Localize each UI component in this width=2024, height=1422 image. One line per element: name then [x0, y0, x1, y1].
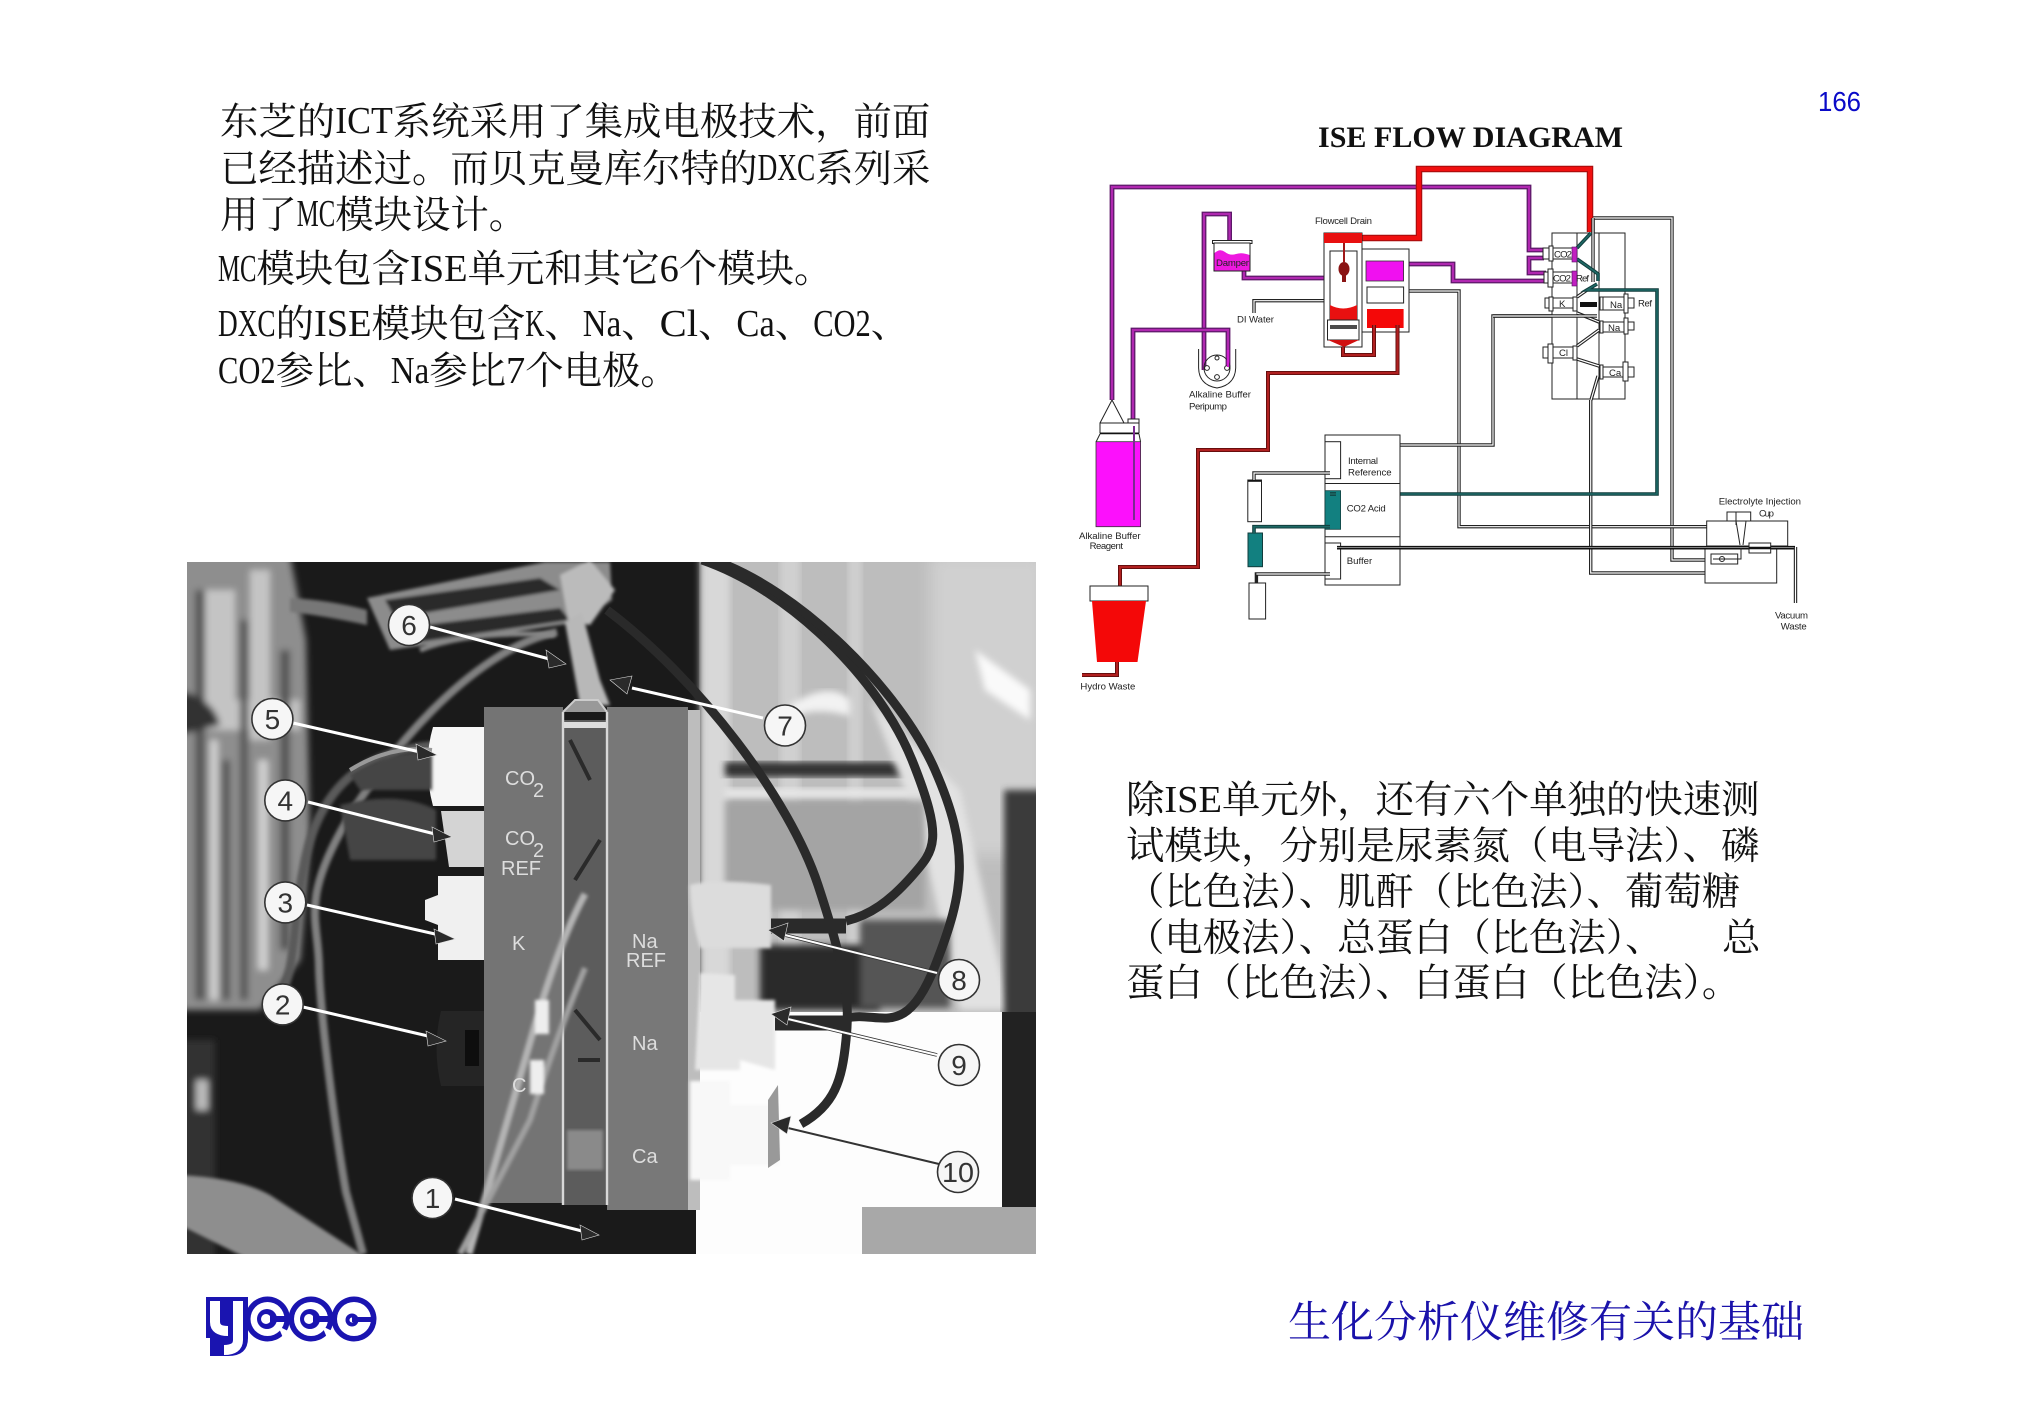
hydro waste cup [1082, 586, 1148, 675]
alkaline buffer reagent bottle [1096, 400, 1141, 527]
line 5: 、 [544, 304, 583, 346]
tubes at bottom-left [187, 1174, 364, 1254]
label: DI water: DI Water [1237, 314, 1275, 326]
bottle: CO2 acid [1248, 527, 1330, 567]
line 6: 参比、 [276, 351, 391, 393]
electrode: CO2 Ref: Ref [1576, 274, 1589, 284]
bottle: internal reference [1248, 473, 1330, 522]
line 2: DXC [758, 147, 815, 189]
label: electrolyte injection cup [1719, 496, 1801, 520]
electrode: CO2 Ref [1544, 269, 1589, 287]
tube: purple damper line [1204, 214, 1230, 370]
tube: purple supply line to electrodes [1112, 187, 1544, 400]
heading: ISE flow diagram: ISE FLOW DIAGRAM [1318, 121, 1623, 154]
label: alkaline buffer reagent: Alkaline Buffer [1079, 531, 1141, 542]
block labels: 2 [533, 840, 544, 862]
block labels: REF [626, 950, 666, 972]
footer title: 生化分析仪维修有关的基础 [1288, 1300, 1804, 1347]
block labels: Na [632, 1033, 658, 1055]
line 6: 个电极。 [525, 350, 679, 393]
damper [1212, 240, 1252, 271]
line 5: 蛋白（比色法）、白蛋白（比色法）。 [1126, 963, 1740, 1005]
line 6 [218, 350, 679, 393]
line 5: 、 [871, 304, 909, 346]
line 6: Na [391, 350, 429, 392]
central ISE block [484, 700, 700, 1210]
right plugs [690, 882, 780, 1180]
block labels: 2 [533, 780, 544, 802]
electrode: Na: Na [1608, 323, 1621, 334]
line 5: 、 [698, 304, 736, 346]
line 3 [220, 193, 527, 237]
callout badge 2: 2 [275, 990, 290, 1020]
block labels: Na [632, 931, 658, 953]
line 4 [218, 248, 832, 291]
callout badge 7 [764, 705, 806, 746]
tube: red flowcell drain [1362, 169, 1590, 238]
line 5: 、 [775, 304, 813, 346]
callout badge 1: 1 [425, 1183, 440, 1214]
line 5: Ca [736, 303, 775, 345]
line 2: 试模块，分别是尿素氮（电导法）、磷 [1126, 825, 1759, 868]
line 3: 模块设计。 [335, 195, 527, 237]
label: alkaline buffer reagent [1079, 531, 1141, 552]
line 5: 、 [621, 304, 660, 346]
tube: purple link CO2 ports [1529, 258, 1546, 273]
line 6: CO2 [218, 350, 276, 392]
line 6: 7 [506, 350, 525, 392]
line 3: MC [297, 193, 335, 235]
electrode: Cl [1543, 344, 1577, 363]
callout badge 1 [412, 1178, 453, 1218]
tube: purple damper to flowcell [1244, 271, 1324, 278]
line 2: 已经描述过。而贝克曼库尔特的 [220, 148, 757, 191]
electrode: CO2 Ref: CO2 [1553, 274, 1571, 284]
logo: yeec [206, 1296, 376, 1356]
label: CO2 acid: CO2 Acid [1347, 504, 1386, 514]
tubes on face [460, 894, 585, 1254]
block labels [501, 768, 666, 1168]
callout badge 5 [252, 698, 293, 740]
line 6: 参比 [429, 351, 506, 393]
block labels: K [512, 933, 526, 955]
line 4: ISE [410, 248, 468, 290]
line 3: 用了 [220, 195, 297, 237]
peripump [1199, 349, 1236, 388]
electrode: Ca: Ca [1609, 368, 1622, 379]
line 5: DXC [218, 303, 276, 345]
electrode: Cl: Cl [1559, 348, 1568, 359]
label: flowcell drain: Flowcell Drain [1315, 216, 1372, 227]
label: alkaline buffer peripump: Peripump [1189, 402, 1227, 412]
tube: dark red waste lines [1120, 325, 1398, 586]
line 4: 6 [660, 248, 679, 290]
callout badge 3 [265, 882, 306, 923]
electrode: Na ref: Ref [1638, 298, 1652, 310]
block labels: REF [501, 858, 541, 880]
label: vacuum waste: Vacuum [1775, 610, 1808, 622]
callout badge 10 [938, 1152, 978, 1192]
letter e [245, 1296, 290, 1342]
line 3: （比色法）、肌酐（比色法）、葡萄糖 [1126, 871, 1740, 914]
callout badge 7: 7 [777, 710, 793, 742]
flowcell side chambers [1362, 249, 1409, 332]
callout badge 10: 10 [942, 1157, 974, 1188]
letter e [288, 1296, 334, 1342]
line 2: 系列采 [815, 149, 930, 191]
photo background [187, 555, 1046, 1257]
callout arrows [293, 627, 939, 1240]
electrode: CO2 [1543, 246, 1577, 262]
line 5: CO2 [813, 303, 871, 345]
tube: purple reagent to pump [1133, 330, 1228, 432]
line 4: 总 [1722, 918, 1761, 960]
block labels: CO [505, 828, 535, 850]
tube arc behind plugs [282, 740, 430, 985]
tube: purple chamber to CO2 ref [1401, 264, 1546, 281]
reagent block [1325, 435, 1400, 585]
callout badge 9 [938, 1044, 980, 1086]
line 1: 系统采用了集成电极技术，前面 [393, 101, 930, 144]
electrode: Na [1600, 318, 1634, 334]
label: internal reference: Reference [1348, 468, 1392, 478]
block labels: Ca [632, 1146, 658, 1168]
flowcell [1324, 233, 1362, 347]
callout badge 4 [265, 780, 306, 821]
line 4: （电极法）、总蛋白（比色法）、 [1126, 917, 1663, 960]
line 1: ICT [335, 100, 393, 142]
damper: Damper [1216, 258, 1250, 269]
line 1: 单元外，还有六个单独的快速测 [1222, 779, 1759, 822]
page number: 166 [1818, 86, 1861, 117]
line 1: 除 [1126, 780, 1165, 822]
callout badge 4: 4 [278, 786, 293, 816]
label: alkaline buffer peripump: Alkaline Buffer [1189, 390, 1252, 400]
text block: other rapid test modules [1126, 779, 1761, 1005]
line 5: Na [583, 303, 621, 345]
block labels: C [512, 1075, 526, 1097]
callout badge 8: 8 [951, 965, 967, 996]
line 5: 的 [276, 304, 314, 346]
chart: ISE flow diagram [1079, 169, 1808, 692]
bottle: buffer [1249, 574, 1330, 619]
label: alkaline buffer reagent: Reagent [1090, 541, 1123, 552]
electrode: Na ref [1600, 294, 1652, 313]
label: internal reference [1348, 456, 1392, 478]
label: internal reference: Internal [1348, 456, 1378, 467]
callout badge 9: 9 [951, 1050, 967, 1081]
label: buffer: Buffer [1347, 556, 1373, 567]
electrode block [1552, 233, 1625, 399]
line 4: 单元和其它 [468, 249, 660, 291]
callout badge 5: 5 [265, 704, 280, 735]
label: electrolyte injection cup: Cup [1759, 508, 1774, 520]
line 4: 模块包含 [256, 248, 410, 291]
line 5: 模块包含 [372, 303, 525, 346]
top assembly [290, 560, 615, 705]
line 5: Cl [660, 303, 698, 345]
tube: white reference lines [1254, 218, 1736, 573]
block labels: CO [505, 768, 535, 790]
line 1: 东芝的 [220, 102, 335, 144]
electrode: Ca [1600, 362, 1634, 381]
line 4: MC [218, 248, 256, 290]
callout badge 8 [938, 960, 980, 1000]
tube: double lines over block [1493, 218, 1599, 400]
electrode: CO2: CO2 [1554, 250, 1572, 260]
black cables [607, 560, 959, 1124]
text block: top-left description [218, 100, 930, 393]
line 4: 个模块。 [679, 249, 832, 291]
electrode: K [1545, 297, 1597, 311]
electrode: K: K [1559, 299, 1566, 310]
line 5 [218, 303, 909, 346]
electrolyte injection cup [1337, 512, 1796, 603]
line 1: ISE [1164, 779, 1222, 821]
callout badge 2 [262, 984, 303, 1025]
callout badge 6: 6 [401, 610, 417, 641]
label: electrolyte injection cup: Electrolyte Injection [1719, 496, 1801, 508]
letter c [332, 1296, 376, 1342]
clear manifold at left [180, 555, 310, 1260]
line 5: K [525, 303, 545, 345]
letter y [206, 1297, 248, 1356]
line 5: ISE [314, 303, 372, 345]
left plugs [340, 727, 484, 1086]
label: alkaline buffer peripump [1189, 390, 1252, 412]
label: vacuum waste [1775, 610, 1808, 632]
electrode: Na ref: Na [1610, 300, 1623, 311]
photo: ISE module with numbered callouts [180, 555, 1046, 1260]
callout badge 6 [388, 604, 430, 646]
callout badge 3: 3 [278, 888, 293, 918]
label: hydro waste: Hydro Waste [1080, 682, 1135, 692]
label: vacuum waste: Waste [1781, 622, 1807, 632]
tube: teal inside acid port [1330, 492, 1336, 496]
tube: teal lines [1336, 233, 1657, 494]
tube arc left [315, 632, 557, 1254]
